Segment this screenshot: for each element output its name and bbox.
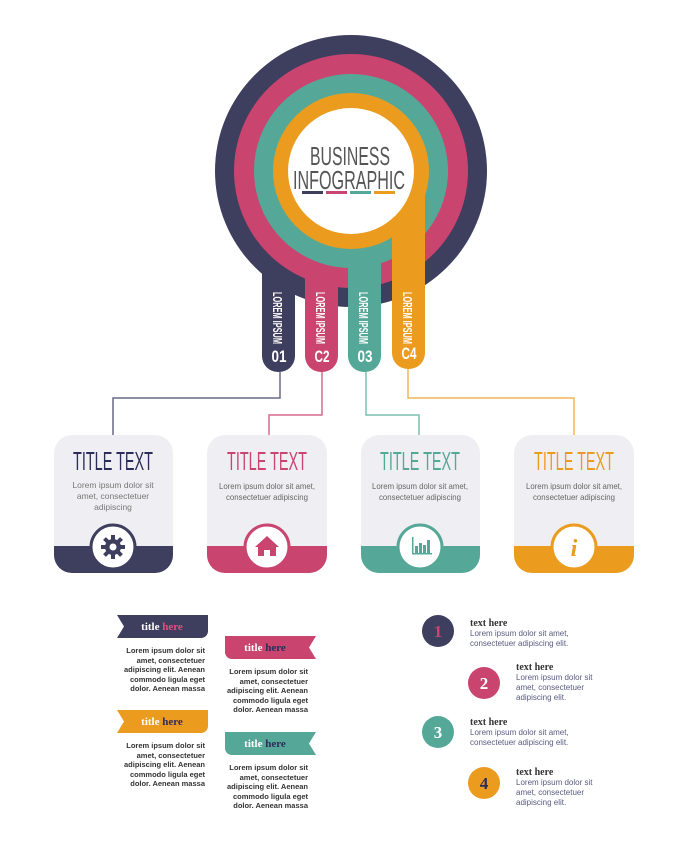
numbered step 3: 3 — [434, 723, 442, 742]
icon: house — [255, 536, 279, 556]
numbered step 3 — [422, 716, 569, 748]
ribbon block: orange: amet, consectetuer — [137, 751, 205, 760]
numbered step 4: text here — [516, 767, 554, 778]
ribbon block: pink: commodo ligula eget — [233, 696, 308, 705]
numbered step 2: 2 — [480, 674, 488, 693]
tab labels: 01 — [272, 347, 286, 366]
numbered step 3: Lorem ipsum dolor sit amet, — [470, 728, 569, 737]
card 4: Lorem ipsum dolor sit amet, — [526, 481, 622, 491]
card 2: Lorem ipsum dolor sit amet, — [219, 481, 315, 491]
ribbon block: teal: amet, consectetuer — [240, 773, 308, 782]
ribbon block: orange: dolor. Aenean massa — [130, 779, 206, 788]
ribbon block: orange — [117, 710, 208, 788]
ribbon block: navy: dolor. Aenean massa — [130, 684, 206, 693]
numbered step 2: amet, consectetuer — [516, 683, 584, 692]
card 3: consectetuer adipiscing — [379, 492, 461, 502]
ribbon block: pink: dolor. Aenean massa — [233, 705, 309, 714]
card 4: TITLE TEXT — [534, 446, 614, 476]
numbered step 1: text here — [470, 618, 508, 629]
icon: bar chart — [412, 537, 432, 554]
tab labels: LOREM IPSUM — [356, 292, 371, 344]
card 1: Lorem ipsum dolor sit — [72, 480, 154, 490]
numbered step 2: adipiscing elit. — [516, 693, 566, 702]
ribbon block: navy — [117, 615, 208, 693]
card 1: TITLE TEXT — [73, 446, 153, 476]
ribbon block: navy: amet, consectetuer — [137, 656, 205, 665]
title: INFOGRAPHIC — [293, 165, 405, 195]
numbered step 1: consectetuer adipiscing elit. — [470, 639, 568, 648]
tab labels: C2 — [314, 347, 330, 366]
ribbon block: orange: Lorem ipsum dolor sit — [126, 741, 205, 750]
title — [293, 141, 405, 195]
numbered step 4: Lorem ipsum dolor sit — [516, 778, 593, 787]
numbered step 1 — [422, 615, 569, 648]
ribbon block: pink: adipiscing elit. Aenean — [227, 686, 308, 695]
card 2: TITLE TEXT — [227, 446, 307, 476]
ribbon block: navy: commodo ligula eget — [130, 675, 205, 684]
numbered step 4 — [468, 767, 593, 807]
ribbon block: teal: dolor. Aenean massa — [233, 801, 309, 810]
numbered step 1: Lorem ipsum dolor sit amet, — [470, 629, 569, 638]
card 4: consectetuer adipiscing — [533, 492, 615, 502]
ribbon block: teal: commodo ligula eget — [233, 792, 308, 801]
ribbon block: pink — [225, 636, 316, 714]
card 1: amet, consectetuer — [77, 491, 149, 501]
icon: gear — [101, 535, 125, 559]
card 1: adipiscing — [94, 502, 132, 512]
numbered step 4: amet, consectetuer — [516, 788, 584, 797]
numbered step 2 — [468, 662, 593, 702]
central rings graphic — [215, 35, 487, 372]
ribbon block: navy: title here — [141, 621, 183, 633]
tab labels: LOREM IPSUM — [270, 292, 285, 344]
title: BUSINESS — [310, 141, 390, 171]
ribbon block: orange: adipiscing elit. Aenean — [124, 760, 205, 769]
numbered step 3: consectetuer adipiscing elit. — [470, 738, 568, 747]
ribbon block: teal: adipiscing elit. Aenean — [227, 782, 308, 791]
numbered step 2: text here — [516, 662, 554, 673]
connector lines — [113, 369, 574, 436]
card 3: TITLE TEXT — [380, 446, 460, 476]
ribbon block: orange: commodo ligula eget — [130, 770, 205, 779]
tab labels — [270, 292, 417, 366]
ribbon block: teal: title here — [244, 738, 286, 750]
numbered step 4: 4 — [480, 774, 489, 793]
tab labels: 03 — [358, 347, 372, 366]
ribbon block: pink: title here — [244, 642, 286, 654]
numbered step 3: text here — [470, 717, 508, 728]
tab labels: LOREM IPSUM — [313, 292, 328, 344]
card 4 — [514, 435, 634, 573]
numbered step 1: 1 — [434, 622, 442, 641]
ribbon block: orange: title here — [141, 716, 183, 728]
ribbon block: teal — [225, 732, 316, 810]
icon: info: i — [571, 536, 578, 562]
tab labels: C4 — [402, 344, 417, 363]
card 2: consectetuer adipiscing — [226, 492, 308, 502]
ribbon block: pink: Lorem ipsum dolor sit — [229, 667, 308, 676]
card 1 — [54, 435, 173, 573]
card 2 — [207, 435, 327, 573]
numbered step 4: adipiscing elit. — [516, 798, 566, 807]
ribbon block: navy: adipiscing elit. Aenean — [124, 665, 205, 674]
ribbon block: pink: amet, consectetuer — [240, 677, 308, 686]
numbered step 2: Lorem ipsum dolor sit — [516, 673, 593, 682]
card 3: Lorem ipsum dolor sit amet, — [372, 481, 468, 491]
card 3 — [361, 435, 480, 573]
tab labels: LOREM IPSUM — [400, 292, 415, 344]
ribbon block: navy: Lorem ipsum dolor sit — [126, 646, 205, 655]
ribbon block: teal: Lorem ipsum dolor sit — [229, 763, 308, 772]
